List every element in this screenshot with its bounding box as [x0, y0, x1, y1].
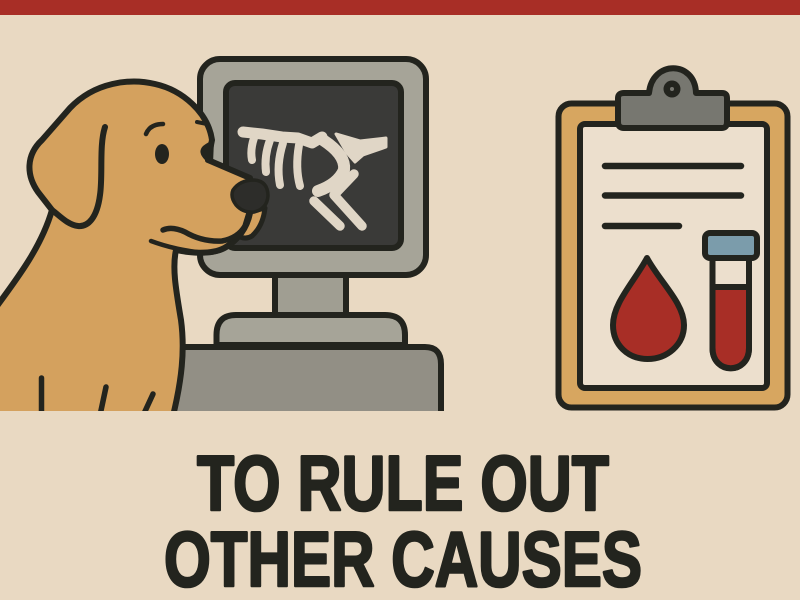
dog tongue — [236, 208, 265, 238]
clipboard board — [558, 104, 788, 408]
icon: dog — [0, 82, 268, 420]
blood drop — [613, 258, 684, 359]
desk block — [170, 347, 441, 420]
dog lower lip — [151, 241, 229, 253]
top red bar — [0, 0, 800, 15]
dog nose — [232, 180, 268, 212]
clipboard clip — [618, 68, 727, 128]
clip hole — [664, 80, 680, 98]
monitor base top — [216, 315, 405, 345]
tube cap — [705, 233, 757, 258]
cover under dog — [0, 411, 800, 425]
far brow — [197, 122, 207, 124]
dog fur mark 3 — [141, 394, 153, 420]
title — [164, 439, 642, 600]
rear leg — [334, 174, 362, 226]
far eye — [200, 140, 214, 164]
dog mouth — [163, 213, 249, 241]
dog body silhouette — [0, 82, 250, 420]
tube blood — [712, 287, 749, 368]
title line 1: TO RULE OUT — [197, 439, 609, 527]
test tube — [705, 233, 757, 368]
dog eye — [155, 144, 169, 164]
dog fur mark 2 — [99, 387, 106, 420]
clipboard paper — [580, 124, 767, 388]
front leg — [314, 201, 340, 226]
ribs — [251, 138, 300, 186]
icon: x-ray monitor — [170, 59, 441, 420]
tube glass — [712, 255, 749, 368]
monitor housing — [200, 59, 426, 275]
x-ray skeleton — [243, 132, 386, 226]
monitor stand neck — [275, 275, 346, 315]
dog fur mark 1 — [39, 378, 44, 420]
spine — [243, 132, 322, 143]
text line 1 — [605, 163, 741, 169]
text line 2 — [605, 192, 741, 199]
dog brow — [146, 124, 163, 134]
pelvis and hind leg — [318, 140, 344, 191]
text line 3 — [605, 223, 679, 229]
dog ear inner line — [52, 127, 105, 226]
x-ray screen — [226, 83, 401, 248]
tail and hip — [336, 134, 386, 162]
icon: clipboard — [558, 68, 788, 408]
